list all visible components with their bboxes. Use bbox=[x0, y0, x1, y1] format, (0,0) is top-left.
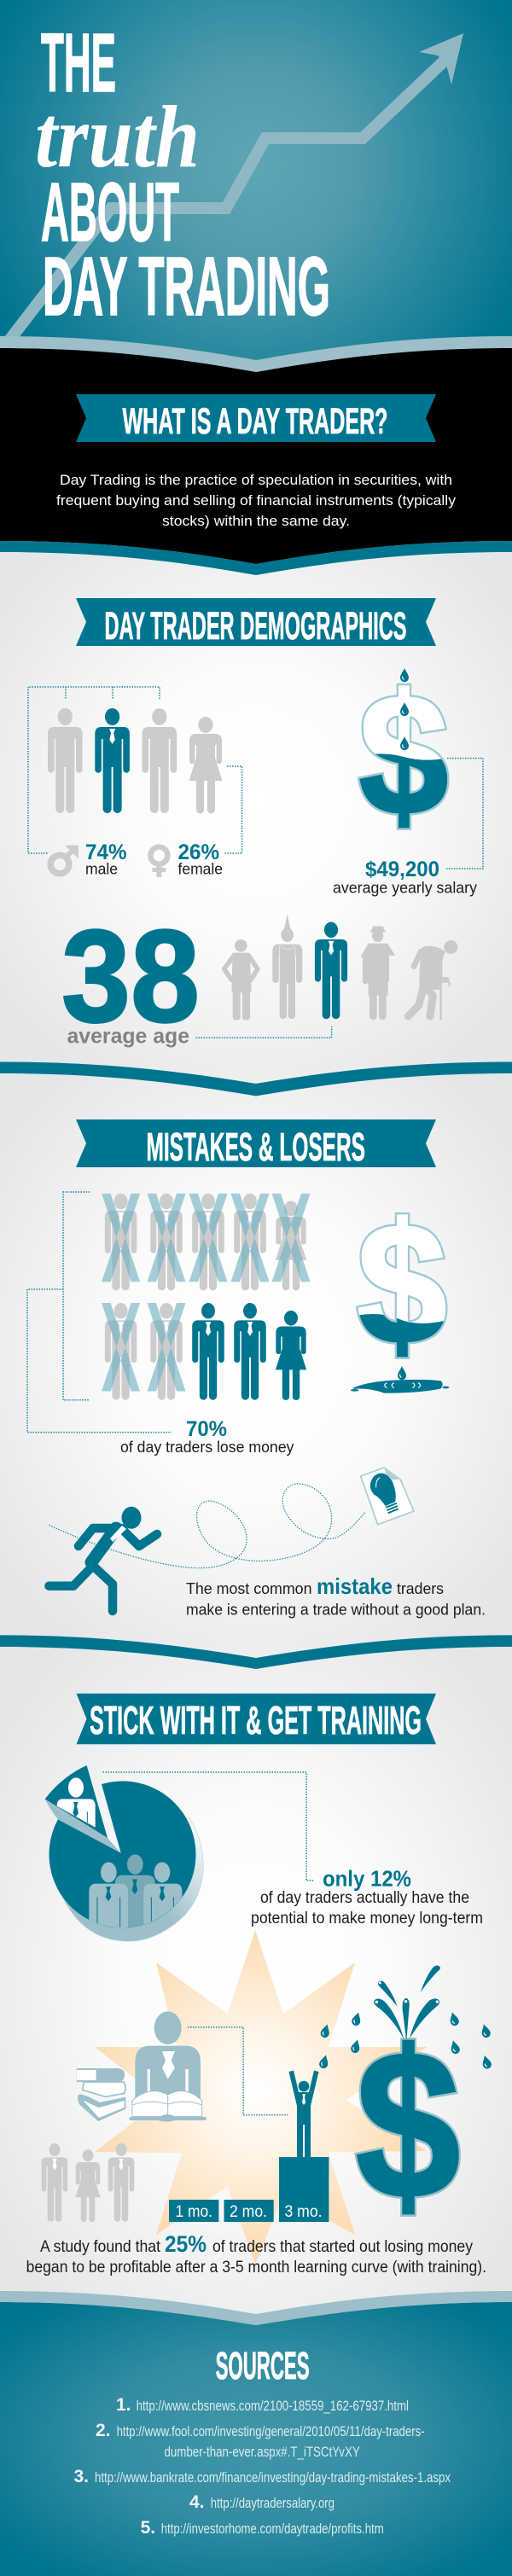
text block: most common mistake bbox=[186, 1573, 486, 1618]
stat: 74% male: 74% bbox=[85, 840, 126, 864]
text block: most common mistake: traders bbox=[397, 1579, 444, 1597]
icon: trader studying bbox=[76, 2011, 207, 2122]
band divider: end of mistakes bbox=[0, 1635, 512, 1669]
icon: dollar fountain: $ bbox=[355, 2007, 461, 2242]
stat: 26% female: 26% bbox=[177, 840, 219, 864]
stat: only 12%: of day traders actually have the bbox=[260, 1889, 469, 1907]
text block: definition: stocks) within the same day. bbox=[162, 514, 350, 529]
text block: 25% become profitable: 25% bbox=[165, 2231, 207, 2257]
text block: 25% become profitable bbox=[26, 2231, 486, 2277]
list: source links: 1. bbox=[116, 2395, 131, 2415]
stat: 74% male: male bbox=[85, 860, 118, 877]
chart: months of training steps: 1 mo. bbox=[176, 2203, 212, 2221]
text block: 25% become profitable: A study found that bbox=[40, 2237, 161, 2256]
text block: most common mistake: mistake bbox=[317, 1573, 393, 1599]
panel: what is a day trader bbox=[0, 348, 512, 564]
chart: age pictogram bbox=[224, 915, 457, 1021]
panel: sources: SOURCES bbox=[216, 2344, 310, 2387]
text block: most common mistake: The most common bbox=[186, 1579, 312, 1597]
text block: definition: frequent buying and selling of financial instruments (typically bbox=[56, 493, 457, 509]
list: source links bbox=[73, 2395, 451, 2538]
chart: pie, one in eight bbox=[45, 1765, 203, 1941]
stat: 70% lose money: of day traders lose money bbox=[120, 1438, 294, 1456]
chart: months of training steps: 2 mo. bbox=[230, 2203, 267, 2221]
list: source links: http://investorhome.com/daytrade/profits.htm bbox=[161, 2521, 384, 2537]
text block: 25% become profitable: of traders that started out losing money bbox=[212, 2237, 473, 2256]
list: source links: 3. bbox=[73, 2467, 89, 2486]
icon: running trader bbox=[49, 1507, 157, 1611]
icon: dollar filling with drops: $ bbox=[358, 659, 449, 851]
list: source links: http://www.cbsnews.com/2100-18559_162-67937.html bbox=[137, 2399, 409, 2414]
list: source links: http://daytradersalary.org bbox=[211, 2496, 335, 2511]
group: three beginner traders bbox=[42, 2143, 134, 2222]
text block: most common mistake: make is entering a trade without a good plan. bbox=[186, 1600, 486, 1618]
text block: definition: Day Trading is the practice of speculation in securities, with bbox=[60, 473, 452, 488]
icon: rising chart arrow bbox=[9, 33, 463, 341]
dotted path from runner to idea bbox=[49, 1484, 365, 1568]
stat: average salary: average yearly salary bbox=[333, 879, 478, 896]
chart: months of training steps bbox=[169, 2070, 329, 2222]
title: ABOUT bbox=[41, 166, 179, 259]
section background: training bbox=[0, 1641, 512, 2329]
title bbox=[35, 16, 330, 333]
stat: average age 38: 38 bbox=[61, 903, 200, 1050]
stat: only 12% bbox=[102, 1772, 483, 1928]
stat: 74% male bbox=[50, 840, 127, 877]
chart: ten traders, seven crossed out bbox=[27, 1192, 311, 1433]
heading: day trader demographics bbox=[76, 598, 436, 648]
title: truth bbox=[35, 88, 200, 186]
stat: 26% female bbox=[150, 840, 223, 877]
icon: draining dollar and puddle: $ bbox=[357, 1188, 447, 1380]
stat: average salary: $49,200 bbox=[365, 858, 439, 881]
list: source links: 2. bbox=[96, 2421, 111, 2440]
stat: 70% lose money bbox=[120, 1417, 294, 1456]
chart: months of training steps: 3 mo. bbox=[285, 2203, 323, 2221]
icon: dollar fountain: $ bbox=[355, 2007, 461, 2242]
band divider: header bbox=[0, 336, 512, 372]
stat: average salary bbox=[333, 759, 483, 896]
icon: dollar fountain bbox=[318, 1965, 492, 2242]
panel: sources bbox=[0, 2302, 512, 2576]
icon: draining dollar and puddle: $ bbox=[357, 1188, 447, 1380]
band divider: end of demographics bbox=[0, 1061, 512, 1096]
band divider: sources bbox=[0, 2291, 512, 2325]
stat: only 12%: only 12% bbox=[323, 1865, 411, 1891]
chart: gender pictogram bbox=[28, 687, 242, 853]
list: source links: 4. bbox=[189, 2492, 205, 2512]
section background: mistakes bbox=[0, 1067, 512, 1641]
stat: 26% female: female bbox=[177, 860, 223, 877]
icon: light bulb note bbox=[361, 1468, 414, 1525]
icon: dollar filling with drops: $ bbox=[358, 659, 449, 851]
stat: average age 38: average age bbox=[67, 1024, 189, 1048]
list: source links: http://www.fool.com/investing/general/2010/05/11/day-traders- bbox=[117, 2424, 425, 2439]
icon: draining dollar and puddle: $ bbox=[357, 1188, 447, 1380]
text block: definition bbox=[56, 473, 457, 529]
section background: demographics bbox=[0, 538, 512, 1067]
stat: only 12%: potential to make money long-term bbox=[251, 1910, 483, 1928]
band divider: demographics bbox=[0, 541, 512, 575]
title: THE bbox=[41, 16, 116, 109]
starburst background bbox=[95, 1930, 427, 2265]
list: source links: dumber-than-ever.aspx#.T_iTSCtYvXY bbox=[164, 2445, 360, 2460]
list: source links: 5. bbox=[141, 2518, 155, 2538]
heading: mistakes and losers bbox=[76, 1119, 436, 1169]
section background: header bbox=[0, 0, 512, 375]
heading: what is a day trader bbox=[76, 394, 436, 442]
stat: 70% lose money: 70% bbox=[186, 1417, 227, 1441]
icon: small dotted connector bbox=[188, 2027, 288, 2115]
icon: dollar filling with drops: $ bbox=[358, 659, 449, 851]
stat: average age 38 bbox=[61, 903, 332, 1050]
